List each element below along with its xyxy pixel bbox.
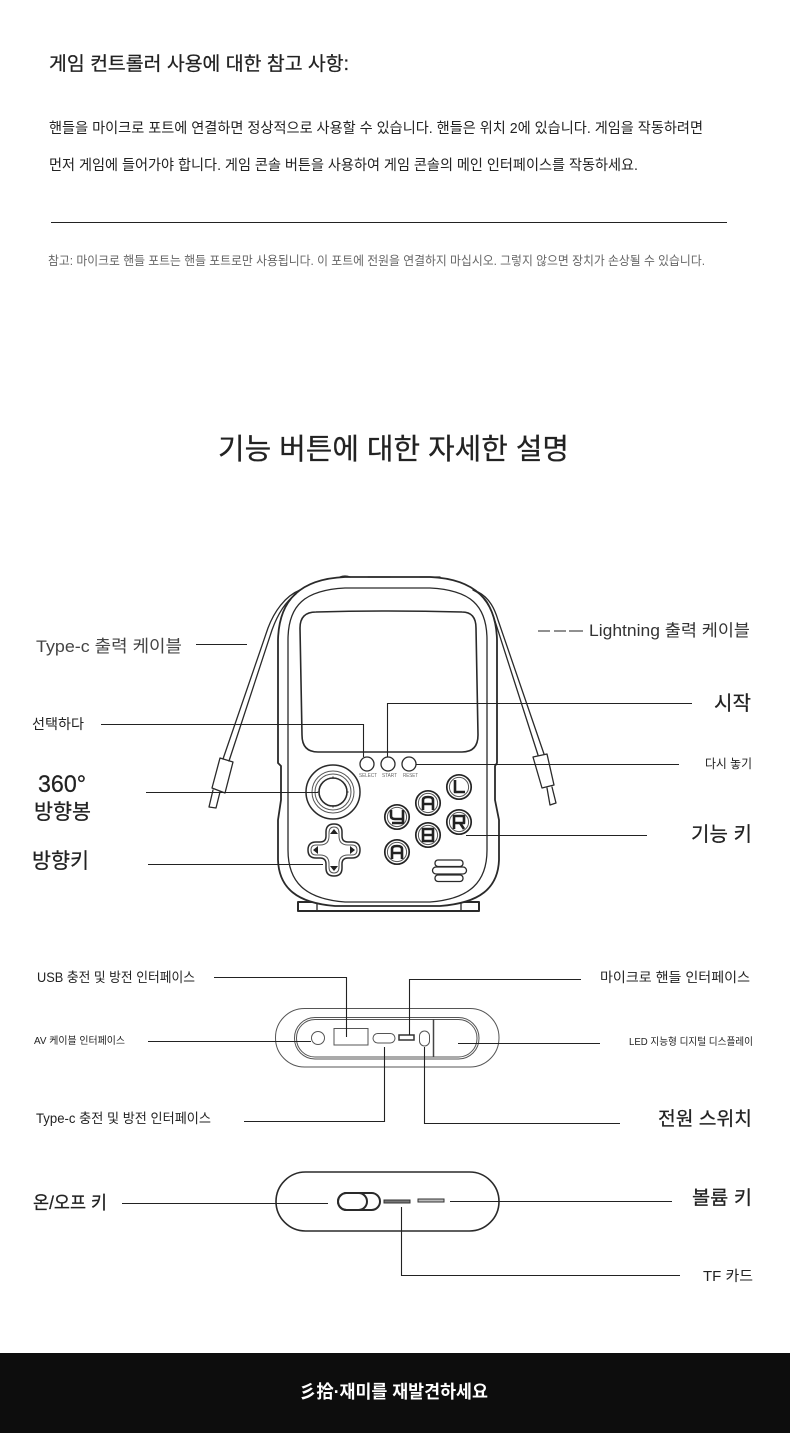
icon: feet — [298, 902, 479, 911]
text block: usage instructions — [49, 120, 703, 174]
text block: usage instructions: 먼저 게임에 들어가야 합니다. 게임 콘솔 버튼을 사용하여 게임 콘솔의 메인 인터페이스를 작동하세요. — [49, 157, 638, 174]
icon: led display — [432, 1019, 434, 1057]
diagram: front view of console — [209, 576, 556, 911]
icon: screen — [300, 611, 478, 752]
heading: function buttons: 기능 버튼에 대한 자세한 설명 — [218, 433, 569, 466]
icon: select start reset buttons — [359, 757, 419, 779]
footer banner: 彡拾·재미를 재발견하세요 — [299, 1381, 488, 1402]
footer banner — [0, 1353, 790, 1433]
icon: on off slider — [338, 1193, 380, 1210]
icon: shell — [276, 1172, 499, 1231]
label: micro handle port: 마이크로 핸들 인터페이스 — [600, 970, 750, 985]
icon: micro port — [399, 1035, 414, 1040]
icon: inner panel — [294, 1018, 479, 1059]
label: function keys: 기능 키 — [691, 823, 752, 846]
icon: usb port — [334, 1028, 368, 1045]
icon: tf card slot — [384, 1200, 410, 1203]
label: av port: AV 케이블 인터페이스 — [34, 1035, 125, 1047]
icon: left cable — [209, 590, 300, 808]
label: start: 시작 — [714, 692, 751, 715]
icon: type-c port — [373, 1034, 395, 1043]
label: power switch — [424, 1047, 752, 1130]
label: type-c port: Type-c 충전 및 방전 인터페이스 — [36, 1111, 211, 1126]
text block: caution note: 참고: 마이크로 핸들 포트는 핸들 포트로만 사용됩니다. 이 포트에 전원을 연결하지 마십시오. 그렇지 않으면 장치가 손상될 수 있습니다. — [48, 253, 705, 268]
icon: volume key — [418, 1199, 444, 1202]
diagram: bottom view — [276, 1172, 499, 1231]
label: 360 joystick — [34, 771, 318, 824]
label: 360 joystick: 방향봉 — [34, 801, 91, 824]
icon: select start reset buttons: START — [382, 773, 398, 779]
heading: usage notes: 게임 컨트롤러 사용에 대한 참고 사항: — [49, 53, 349, 75]
label: reset: 다시 놓기 — [705, 757, 752, 771]
text block: usage instructions: 핸들을 마이크로 포트에 연결하면 정상적으로 사용할 수 있습니다. 핸들은 위치 2에 있습니다. 게임을 작동하려면 — [49, 120, 703, 137]
icon: right cable — [473, 590, 556, 805]
icon: console body — [278, 576, 499, 906]
label: lightning output cable: Lightning 출력 케이블 — [589, 621, 750, 640]
icon: select start reset buttons: RESET — [403, 773, 419, 779]
icon: speaker — [432, 860, 466, 882]
icon: power switch — [420, 1031, 430, 1046]
label: led display: LED 지능형 디지털 디스플레이 — [629, 1036, 753, 1048]
label: direction keys: 방향키 — [32, 850, 89, 873]
label: select: 선택하다 — [32, 716, 84, 732]
label: select — [32, 716, 364, 757]
label: usb port — [37, 970, 346, 1037]
label: tf card — [402, 1207, 753, 1285]
icon: action buttons — [385, 775, 471, 864]
label: usb port: USB 충전 및 방전 인터페이스 — [37, 970, 195, 985]
icon: outer shell — [276, 1008, 499, 1067]
label: type-c output cable: Type-c 출력 케이블 — [36, 637, 182, 656]
icon: av port — [312, 1032, 324, 1044]
icon: select start reset buttons: SELECT — [359, 773, 378, 779]
label: 360 joystick: 360° — [38, 771, 86, 798]
label: start — [388, 692, 751, 757]
label: power switch: 전원 스위치 — [658, 1108, 752, 1130]
diagram: top ports view — [276, 1008, 499, 1067]
label: type-c port — [36, 1047, 384, 1126]
label: micro handle port — [410, 970, 750, 1035]
label: volume key: 볼륨 키 — [692, 1187, 752, 1209]
icon: 360 joystick — [306, 765, 360, 819]
label: on/off key: 온/오프 키 — [33, 1193, 107, 1213]
icon: directional pad — [308, 824, 360, 876]
label: tf card: TF 카드 — [703, 1268, 753, 1285]
